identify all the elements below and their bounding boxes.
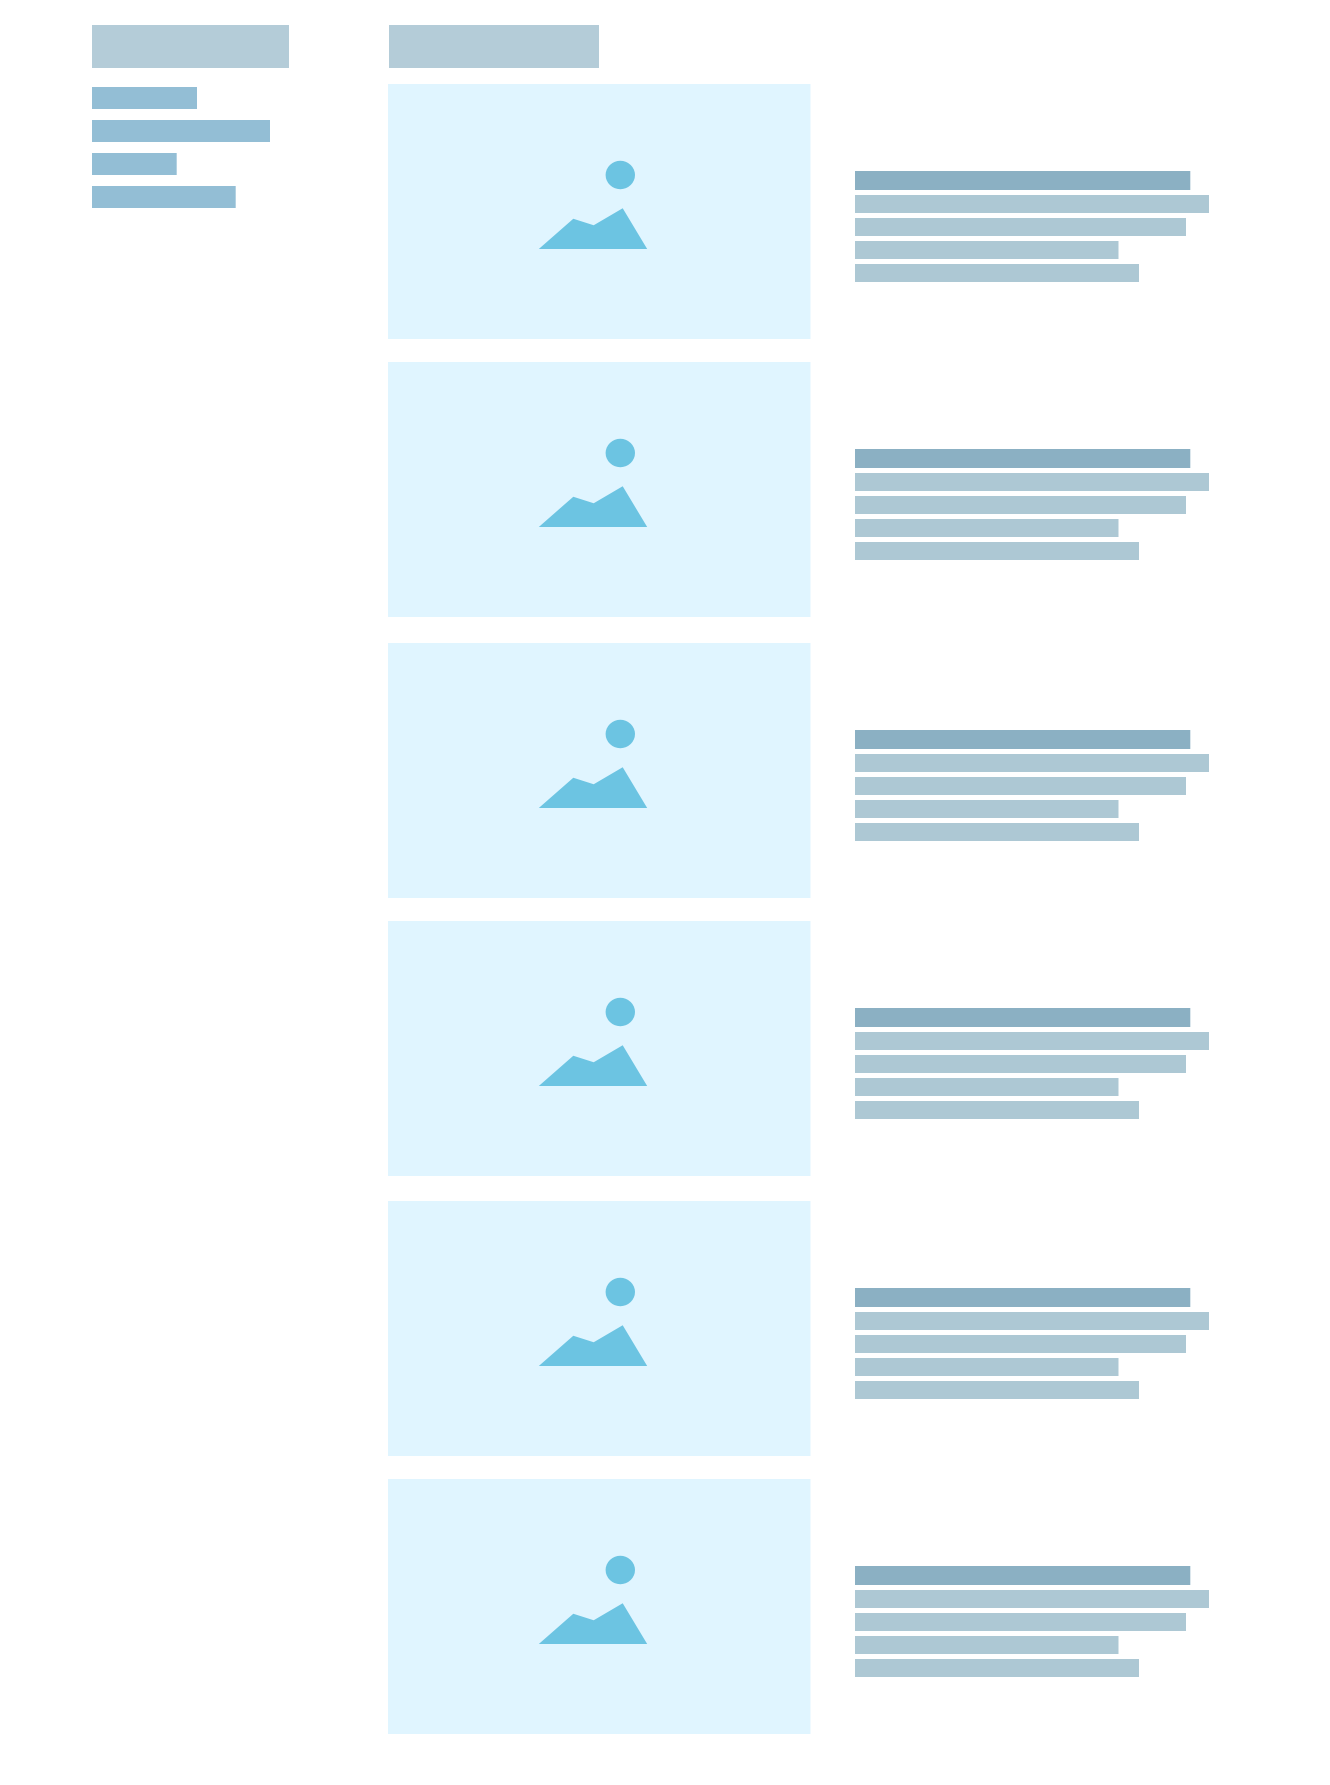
- text block 4: [855, 1008, 1209, 1119]
- panel: image placeholder 4: [388, 921, 810, 1176]
- list item 4: [92, 186, 236, 208]
- text block 1: [855, 171, 1209, 282]
- heading: center column: [389, 25, 599, 68]
- panel: image placeholder 2: [388, 362, 810, 617]
- panel: image placeholder 6: [388, 1479, 810, 1734]
- text block 3: [855, 730, 1209, 841]
- panel: image placeholder 3: [388, 643, 810, 898]
- list: left column items: [92, 87, 270, 208]
- heading: left column: [92, 25, 289, 68]
- text block 2: [855, 449, 1209, 560]
- text block 6: [855, 1566, 1209, 1677]
- panel: image placeholder 1: [388, 84, 810, 339]
- list item 3: [92, 153, 177, 175]
- list item 2: [92, 120, 270, 142]
- list item 1: [92, 87, 197, 109]
- text block 5: [855, 1288, 1209, 1399]
- panel: image placeholder 5: [388, 1201, 810, 1456]
